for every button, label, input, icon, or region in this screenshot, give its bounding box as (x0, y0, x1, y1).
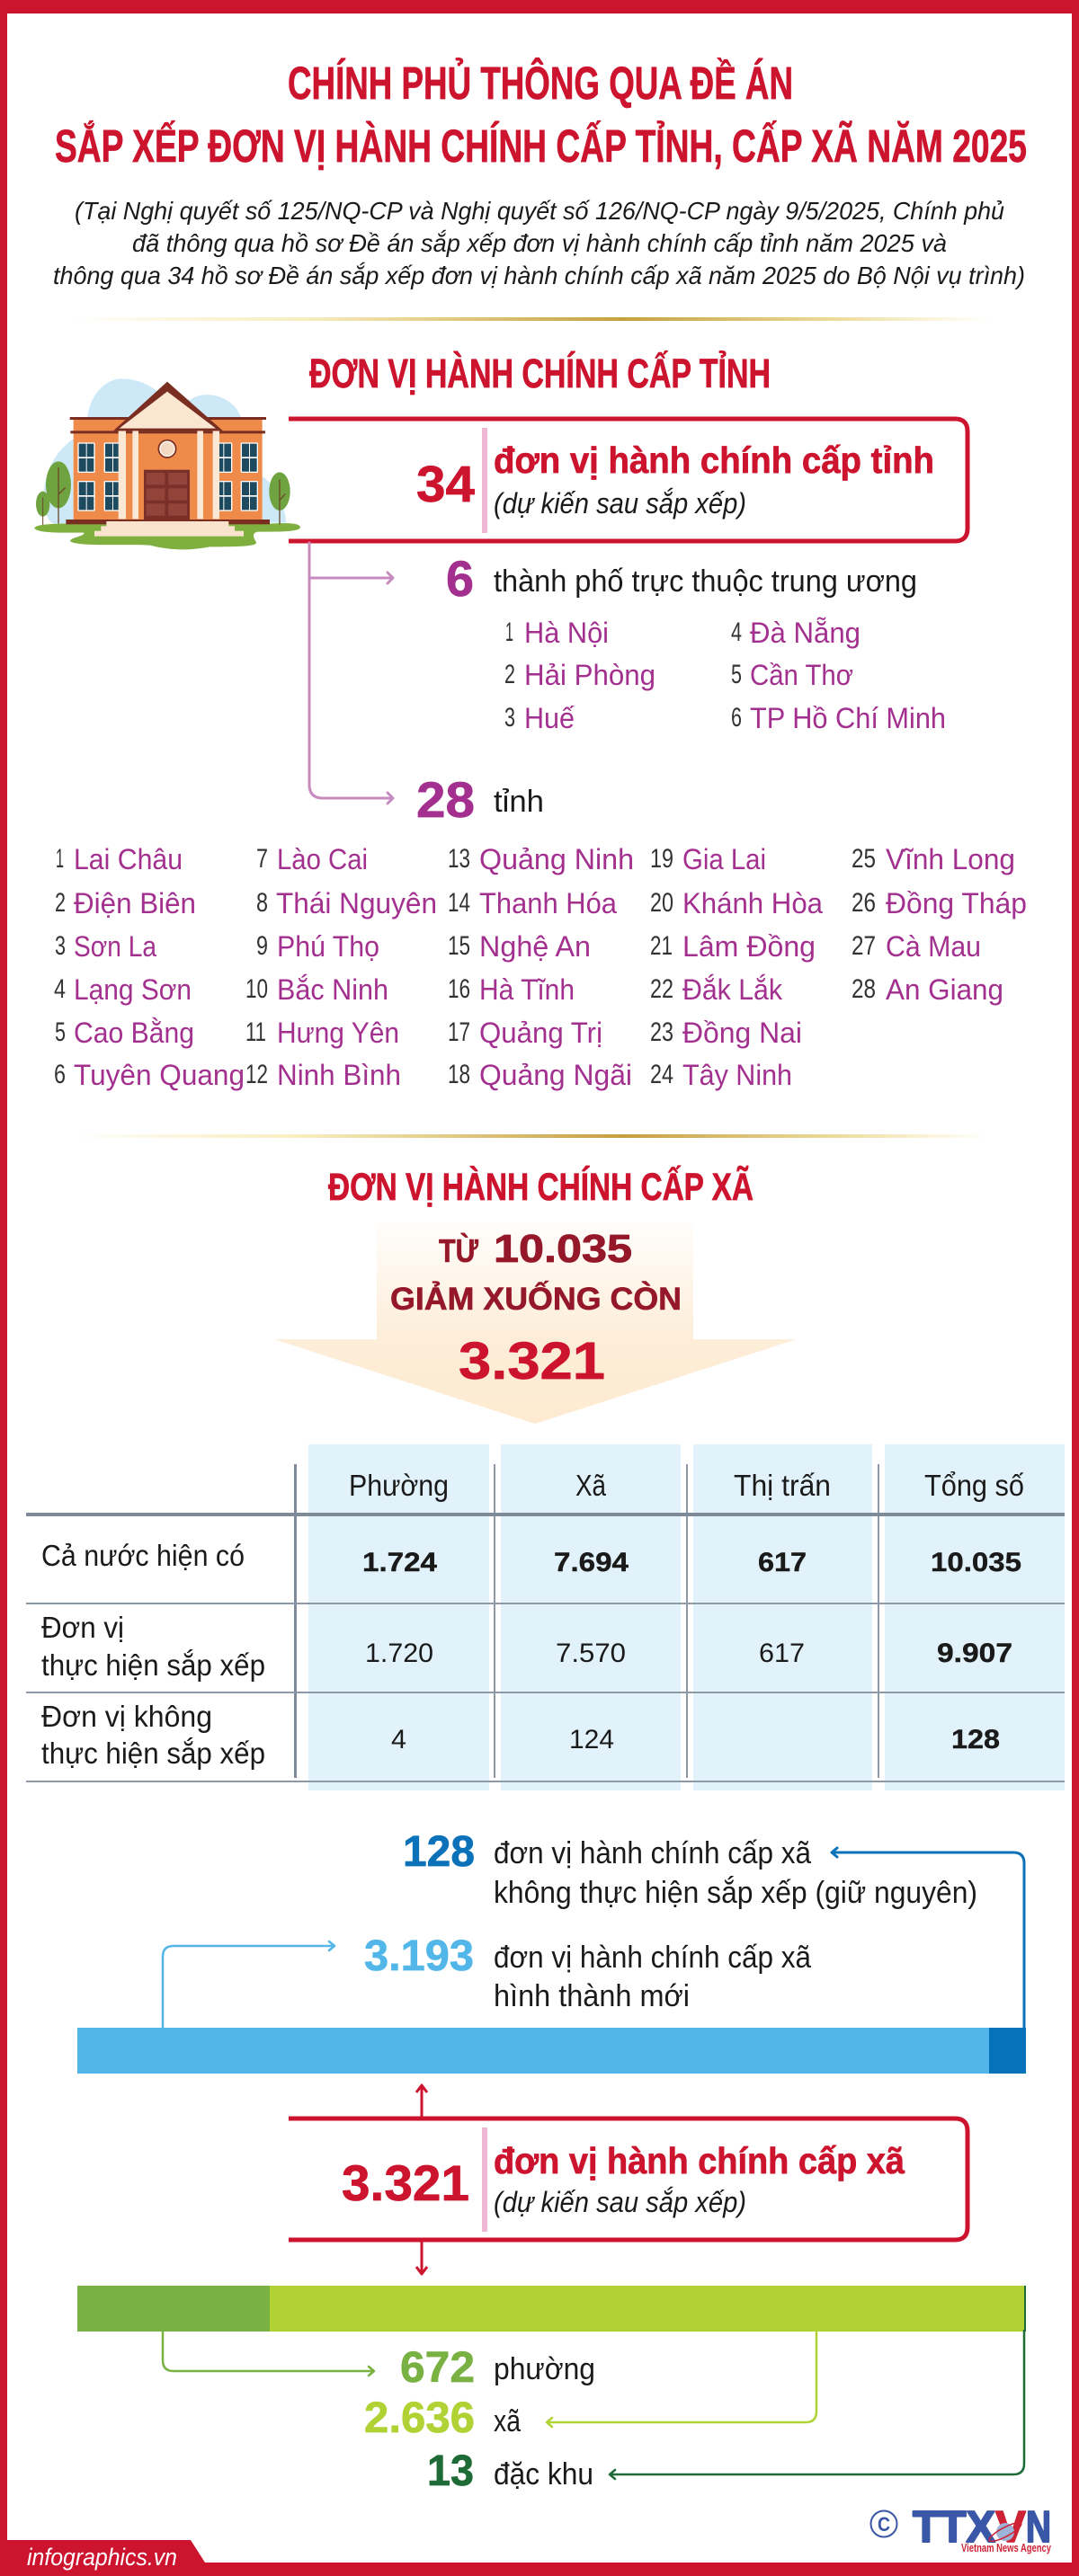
table header (349, 1469, 1024, 1502)
panel: 6 centrally-run cities: 2 (504, 660, 515, 689)
panel: 3.321 commune units: (dự kiến sau sắp xếp) (494, 2186, 746, 2218)
stat: 3.193 new units: 3.193 (364, 1932, 474, 1980)
arrow: lime connector to communes (547, 2331, 816, 2427)
logo: TTXVN (870, 2503, 1051, 2554)
panel: 28 provinces: 6 (54, 1060, 66, 1089)
panel: 28 provinces: Thái Nguyên (276, 887, 437, 919)
panel: 28 provinces: 10 (245, 974, 268, 1004)
panel: 28 provinces: 20 (650, 888, 673, 918)
panel: 28 provinces: Đồng Tháp (886, 887, 1027, 919)
panel: 28 provinces: Cao Bằng (74, 1017, 194, 1049)
panel: 28 provinces: 2 (55, 888, 66, 918)
panel: 28 provinces: Bắc Ninh (277, 973, 388, 1006)
heading: commune level: ĐƠN VỊ HÀNH CHÍNH CẤP XÃ (328, 1166, 754, 1209)
table row: units rearranged: 617 (759, 1639, 805, 1668)
panel: 28 provinces: Hà Tĩnh (479, 973, 575, 1006)
panel: 6 centrally-run cities: 5 (731, 660, 742, 689)
table row: units not rearranged (41, 1700, 1000, 1770)
footer: source: infographics.vn (27, 2544, 177, 2571)
panel: 28 provinces: Điện Biên (74, 887, 196, 919)
stat: 128 units unchanged: đơn vị hành chính cấp xã (494, 1836, 811, 1870)
callout: down arrow from 10.035 to 3.321: TỪ (439, 1231, 478, 1269)
stat: 3.193 new units: hình thành mới (494, 1979, 690, 2013)
panel: 28 provinces: Thanh Hóa (479, 887, 617, 919)
panel: 28 provinces: Lai Châu (74, 843, 183, 875)
panel: 28 provinces (54, 771, 1027, 1091)
arrow: dark blue connector (832, 1848, 1024, 2029)
table row: units rearranged (41, 1611, 1012, 1682)
panel: 28 provinces: 28 (852, 974, 876, 1004)
table row: whole country: 7.694 (554, 1548, 629, 1577)
panel: 6 centrally-run cities: TP Hồ Chí Minh (750, 702, 946, 734)
panel: 6 centrally-run cities: 6 (731, 703, 742, 733)
panel: 6 centrally-run cities: Huế (524, 702, 575, 734)
arrow: light blue connector (163, 1941, 334, 2029)
stat: 672 wards (400, 2344, 595, 2392)
arrow: red down (416, 2242, 427, 2274)
table header: Xã (575, 1469, 607, 1502)
table row: units not rearranged: 4 (391, 1725, 406, 1754)
stat: 128 units unchanged: không thực hiện sắp xếp (giữ nguyên) (494, 1876, 977, 1910)
panel: 6 centrally-run cities: Đà Nẵng (750, 617, 861, 649)
stat: 2.636 communes (364, 2394, 521, 2442)
stat: 672 wards: phường (494, 2352, 595, 2386)
title: CHÍNH PHỦ THÔNG QUA ĐỀ ÁN (288, 57, 793, 109)
heading: provincial level: ĐƠN VỊ HÀNH CHÍNH CẤP TỈNH (309, 351, 771, 396)
table row: units rearranged: Đơn vị (41, 1611, 124, 1644)
table row: whole country: 1.724 (362, 1548, 437, 1577)
panel: 28 provinces: 1 (56, 844, 64, 874)
panel: 28 provinces: 23 (650, 1017, 673, 1047)
panel: 28 provinces: Đồng Nai (682, 1017, 802, 1049)
table header: Tổng số (924, 1469, 1024, 1502)
panel: 28 provinces: 5 (55, 1017, 66, 1047)
stat: 2.636 communes: xã (494, 2404, 521, 2438)
table header: Thị trấn (734, 1469, 831, 1502)
table row: whole country: Cả nước hiện có (41, 1539, 245, 1572)
panel: 28 provinces: 3 (55, 931, 66, 961)
panel: 28 provinces: Quảng Ngãi (479, 1059, 632, 1091)
panel: 6 centrally-run cities: thành phố trực thuộc trung ương (494, 564, 917, 599)
panel: 28 provinces: Quảng Trị (479, 1017, 602, 1049)
panel: 28 provinces: 24 (650, 1060, 673, 1089)
bar: 672 wards, 2.636 communes, 13 special zones (77, 2286, 1026, 2332)
stat: 3.193 new units: đơn vị hành chính cấp xã (494, 1941, 811, 1975)
panel: 6 centrally-run cities: Hà Nội (524, 617, 609, 649)
panel: 28 provinces: 14 (448, 888, 470, 918)
panel: 6 centrally-run cities: 6 (446, 550, 474, 607)
table row: units not rearranged: Đơn vị không (41, 1700, 212, 1733)
stat: 13 special zones: 13 (427, 2447, 474, 2495)
arrow: dark green connector to special zones (610, 2331, 1024, 2479)
panel: 28 provinces: 28 (416, 771, 475, 828)
table row: whole country: 617 (758, 1548, 807, 1577)
panel: 34 provincial units: (dự kiến sau sắp xếp) (494, 487, 746, 520)
logo: TTXVN: V (995, 2503, 1026, 2552)
panel: 28 provinces: Ninh Bình (277, 1059, 401, 1091)
callout: down arrow from 10.035 to 3.321: GIẢM XUỐNG CÒN (390, 1281, 682, 1317)
panel: 28 provinces: tỉnh (494, 785, 544, 819)
panel: 28 provinces: 17 (448, 1017, 470, 1047)
title (55, 57, 1027, 172)
panel: 6 centrally-run cities: Hải Phòng (524, 659, 655, 691)
callout: down arrow from 10.035 to 3.321: 3.321 (459, 1332, 605, 1390)
panel: 28 provinces: Khánh Hòa (682, 887, 823, 919)
arrow: red up (416, 2085, 427, 2118)
panel: 28 provinces: 27 (852, 931, 876, 961)
logo: TTXVN: TTX (913, 2503, 995, 2552)
panel: 28 provinces: 26 (852, 888, 876, 918)
panel: 28 provinces: 22 (650, 974, 673, 1004)
panel: 6 centrally-run cities: 3 (504, 703, 515, 733)
panel: 3.321 commune units (289, 2119, 968, 2240)
stat: 2.636 communes: 2.636 (364, 2394, 475, 2442)
panel: 28 provinces: 15 (448, 931, 470, 961)
panel: 28 provinces: 18 (448, 1060, 470, 1089)
panel: 28 provinces: Vĩnh Long (886, 843, 1015, 875)
panel: 28 provinces: 16 (448, 974, 470, 1004)
stat: 672 wards: 672 (400, 2344, 475, 2392)
table header: Phường (349, 1469, 449, 1502)
panel: 28 provinces: Tuyên Quang (74, 1059, 245, 1091)
table row: units not rearranged: thực hiện sắp xếp (41, 1737, 265, 1770)
panel: 28 provinces: Gia Lai (682, 843, 766, 875)
table row: units not rearranged: 128 (951, 1725, 1000, 1754)
icon: building illustration (34, 379, 300, 549)
panel: 28 provinces: 7 (256, 844, 268, 874)
table row: units rearranged: thực hiện sắp xếp (41, 1648, 265, 1682)
arrows: branch to cities and provinces (309, 543, 393, 804)
panel: 28 provinces: Cà Mau (886, 930, 981, 963)
panel: 28 provinces: An Giang (886, 973, 1003, 1006)
panel: 28 provinces: 12 (245, 1060, 268, 1089)
table row: units rearranged: 9.907 (937, 1639, 1012, 1668)
panel: 28 provinces: Hưng Yên (277, 1017, 399, 1049)
subtitle: (Tại Nghị quyết số 125/NQ-CP và Nghị quyết số 126/NQ-CP ngày 9/5/2025, Chính phủ (75, 197, 1004, 225)
panel: 28 provinces: 11 (245, 1017, 266, 1047)
panel: 28 provinces: Lào Cai (277, 843, 368, 875)
panel: 6 centrally-run cities: 4 (731, 617, 742, 647)
arrow: green connector to wards (163, 2331, 374, 2376)
table: commune counts (26, 1444, 1065, 1790)
stat: 13 special zones: đặc khu (494, 2457, 593, 2492)
table row: units rearranged: 7.570 (556, 1639, 626, 1668)
panel: 28 provinces: Quảng Ninh (479, 843, 634, 875)
table row: units rearranged: 1.720 (365, 1639, 433, 1668)
panel: 3.321 commune units: 3.321 (342, 2154, 469, 2211)
subtitle: thông qua 34 hồ sơ Đề án sắp xếp đơn vị hành chính cấp xã năm 2025 do Bộ Nội vụ trình) (53, 262, 1025, 289)
panel: 3.321 commune units: đơn vị hành chính cấp xã (494, 2140, 905, 2181)
panel: 6 centrally-run cities (446, 550, 946, 734)
panel: 28 provinces: Phú Thọ (277, 930, 379, 963)
stat: 128 units unchanged: 128 (403, 1828, 475, 1876)
panel: 34 provincial units: 34 (416, 456, 475, 513)
panel: 28 provinces: 19 (650, 844, 673, 874)
panel: 28 provinces: 9 (256, 931, 268, 961)
bar: 3.193 new and 128 unchanged (77, 2028, 1026, 2074)
logo: TTXVN: C (878, 2513, 890, 2536)
panel: 28 provinces: Lâm Đồng (682, 930, 816, 963)
callout: down arrow from 10.035 to 3.321: 10.035 (494, 1227, 632, 1271)
panel: 28 provinces: Lạng Sơn (74, 973, 192, 1006)
subtitle: đã thông qua hồ sơ Đề án sắp xếp đơn vị hành chính cấp tỉnh năm 2025 và (132, 229, 947, 257)
table row: whole country (41, 1539, 1021, 1577)
panel: 6 centrally-run cities: Cần Thơ (750, 659, 853, 691)
stat: 3.193 new units (364, 1932, 811, 2013)
callout: down arrow from 10.035 to 3.321 (274, 1223, 797, 1424)
table row: units not rearranged: 124 (569, 1725, 614, 1754)
panel: 28 provinces: 13 (448, 844, 470, 874)
panel: 28 provinces: Nghệ An (479, 930, 591, 963)
subtitle (53, 197, 1025, 289)
panel: 28 provinces: 8 (256, 888, 268, 918)
panel: 28 provinces: 4 (54, 974, 66, 1004)
panel: 28 provinces: Sơn La (74, 930, 156, 963)
panel: 28 provinces: Đắk Lắk (682, 973, 783, 1006)
panel: 28 provinces: Tây Ninh (682, 1059, 792, 1091)
panel: 28 provinces: 21 (650, 931, 673, 961)
panel: 34 provincial units: đơn vị hành chính cấp tỉnh (494, 440, 934, 481)
panel: 6 centrally-run cities: 1 (505, 617, 513, 647)
table row: whole country: 10.035 (931, 1548, 1021, 1577)
stat: 128 units unchanged (403, 1828, 977, 1910)
logo: TTXVN: N (1026, 2503, 1051, 2552)
panel: 28 provinces: 25 (852, 844, 876, 874)
panel: 34 provincial units (289, 419, 968, 541)
stat: 13 special zones (427, 2447, 593, 2495)
logo: TTXVN: Vietnam News Agency (961, 2542, 1051, 2554)
